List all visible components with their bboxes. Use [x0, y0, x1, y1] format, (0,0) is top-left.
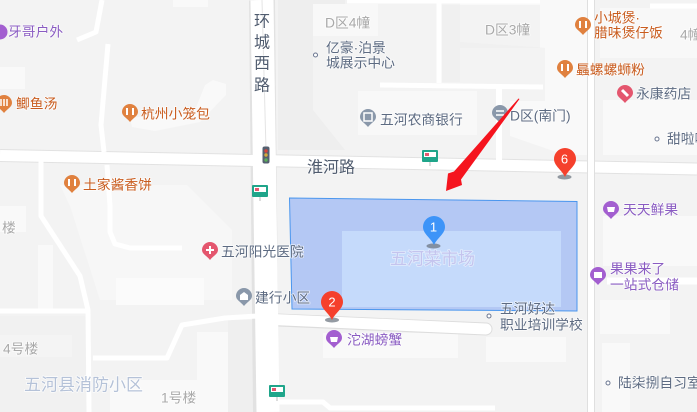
road label: 环城西路	[254, 14, 270, 94]
poi: 果果来了一站式仓储: 果果来了	[610, 262, 665, 276]
poi: 鲫鱼汤: 鲫鱼汤	[16, 96, 57, 112]
poi: 天天鲜果: 天天鲜果	[623, 202, 678, 218]
road label: 淮河路: 淮河路	[307, 158, 355, 176]
road label: 环城西路: 路	[254, 76, 270, 94]
poi: 鲫鱼汤	[0, 95, 57, 113]
icon: bus stop	[252, 185, 268, 201]
building labels: 1号楼	[161, 390, 196, 406]
poi: 果果来了一站式仓储	[590, 262, 679, 292]
label: 亿豪·泊景城展示中心: 亿豪·泊景	[326, 40, 386, 56]
poi: 小城煲·腊味煲仔饭	[575, 10, 663, 40]
label: 亿豪·泊景城展示中心: 城展示中心	[326, 56, 395, 70]
poi: 土家酱香饼: 土家酱香饼	[83, 176, 152, 192]
icon: traffic light	[262, 146, 270, 164]
poi: 建行小区: 建行小区	[255, 290, 310, 306]
marker 2: 2	[328, 294, 336, 310]
road label: 环城西路: 西	[254, 56, 270, 72]
poi: 螺蛳粉: 螶螺螺蛳粉	[576, 62, 645, 78]
icon: bus stop	[422, 150, 438, 166]
poi: 五河农商银行: 五河农商银行	[380, 112, 463, 128]
poi: 五河农商银行	[360, 109, 463, 128]
marker 6: 6	[561, 152, 568, 166]
poi: 沱湖螃蟹: 沱湖螃蟹	[347, 332, 402, 348]
building labels: D区4幢	[325, 14, 370, 30]
poi: 螺蛳粉	[557, 60, 645, 78]
poi: 土家酱香饼	[64, 175, 152, 193]
icon: bus stop	[269, 385, 285, 401]
poi: D区(南门): D区(南门)	[510, 108, 571, 124]
road label: 环城西路: 环	[254, 14, 270, 30]
poi: 小城煲·腊味煲仔饭: 腊味煲仔饭	[594, 24, 663, 40]
poi: 五河阳光医院	[202, 242, 304, 260]
marker 6	[554, 148, 576, 180]
poi: 五河阳光医院: 五河阳光医院	[221, 244, 304, 260]
poi: D区(南门)	[492, 105, 571, 124]
label: 五河菜市场: 五河菜市场	[390, 250, 475, 268]
road label: 环城西路: 城	[254, 34, 270, 52]
poi: 果果来了一站式仓储: 一站式仓储	[610, 278, 679, 292]
market area highlight	[290, 198, 577, 311]
building labels: 楼	[2, 220, 16, 236]
poi: 杭州小笼包: 杭州小笼包	[141, 106, 210, 122]
label: 亿豪·泊景城展示中心	[314, 40, 395, 70]
arrow	[446, 98, 520, 191]
marker 2	[321, 291, 343, 322]
poi: 牙哥户外: 牙哥户外	[8, 24, 63, 40]
poi: 天天鲜果	[603, 201, 678, 219]
label: 五河好达职业培训学校	[487, 302, 583, 332]
poi: 小城煲·腊味煲仔饭: 小城煲·	[594, 10, 640, 26]
marker 1: 1	[430, 220, 437, 234]
poi: 建行小区	[236, 288, 310, 306]
poi: 永康药店: 永康药店	[636, 86, 691, 102]
label: 五河好达职业培训学校: 职业培训学校	[500, 316, 583, 332]
marker 1	[423, 216, 445, 248]
poi: 沱湖螃蟹	[326, 330, 402, 348]
label: 五河好达职业培训学校: 五河好达	[500, 302, 555, 316]
building labels: D区3幢	[485, 22, 530, 38]
poi: 杭州小笼包	[122, 104, 210, 122]
building labels: 4号楼	[3, 342, 38, 356]
poi: 永康药店	[617, 85, 691, 103]
area label: 五河县消防小区: 五河县消防小区	[24, 376, 143, 394]
